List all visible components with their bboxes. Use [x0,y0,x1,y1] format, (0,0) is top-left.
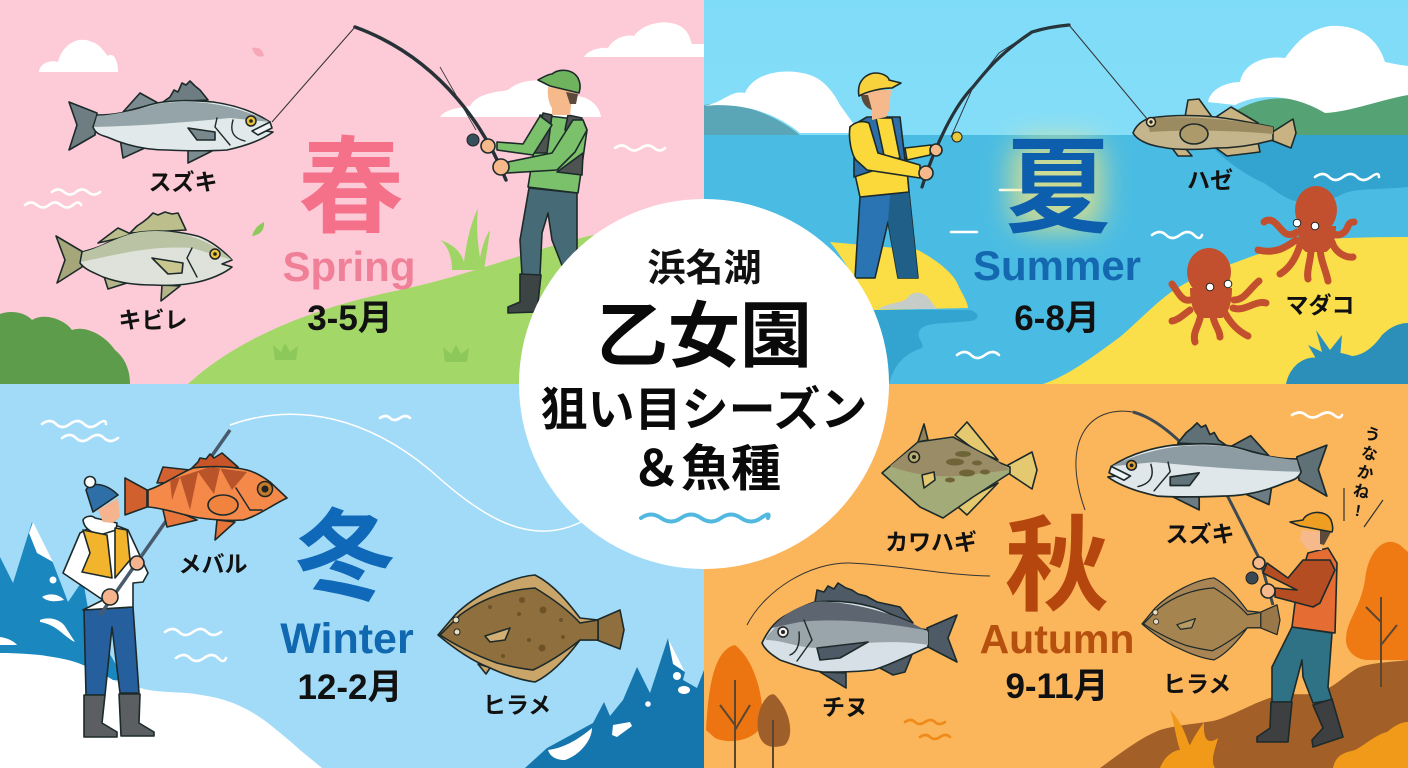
fish: mebaru [125,453,287,540]
line: winter [230,414,585,531]
speech: unakane: か [1355,462,1375,484]
decorative wave [641,514,769,522]
summer small water [874,310,978,384]
winter left trees [0,522,125,680]
summer sea [704,135,1408,384]
spring left bush [0,312,130,384]
angler: autumn [1253,512,1343,747]
heading: autumn kanji: 秋 [1005,509,1109,625]
summer deep water [1212,135,1408,203]
octopus: top [1258,186,1354,281]
spring hill [188,225,704,384]
petals [252,48,264,57]
rod and line: summer [922,25,1148,187]
heading: Winter: Winter [280,615,414,663]
fish: haze [1133,99,1296,156]
panel: autumn [704,384,1408,768]
spring clouds [39,22,704,117]
label: kawahagi: カワハギ [885,529,977,555]
angler: winter [63,430,230,737]
heading: spring kanji: 春 [298,130,404,247]
months: summer: 6-8月 [1014,299,1100,338]
label: suzuki autumn: スズキ [1166,521,1234,547]
months: spring: 3-5月 [307,299,393,338]
heading: Autumn: Autumn [980,616,1134,662]
autumn trees right [1346,542,1408,687]
months: winter: 12-2月 [297,668,403,707]
summer bush [1286,323,1408,384]
label: chinu: チヌ [822,694,868,720]
label: suzuki: スズキ [148,169,218,195]
label: hirame winter: ヒラメ [483,692,551,718]
months: autumn: 9-11月 [1005,667,1109,706]
speech: unakane: ! [1354,503,1362,520]
heading: winter kanji: 冬 [295,502,395,614]
summer far hills [704,104,800,135]
autumn bush [1333,722,1408,768]
fish: hirame autumn [1142,578,1280,660]
panel: spring [0,0,704,384]
rod and line: spring [272,27,506,180]
autumn waves [905,412,1342,739]
spring grass [273,208,490,362]
angler: spring [481,70,587,313]
heading: Summer: Summer [973,242,1141,289]
center circle [519,199,889,569]
fish: kibire [56,212,232,301]
panel: summer [704,0,1408,384]
fish: chinu [762,583,957,688]
autumn left trees [706,645,790,768]
label: haze: ハゼ [1187,167,1233,193]
fish: kawahagi [882,422,1037,518]
summer kanji glow [1012,140,1102,230]
speech: unakane [1344,425,1383,527]
summer rock [878,293,937,309]
speech: unakane: う [1362,425,1382,446]
heading: summer kanji: 夏 [1005,130,1111,247]
summer clouds [704,26,1408,133]
rod and line: autumn [747,411,1273,625]
label: kibire: キビレ [118,307,188,333]
label: hirame autumn: ヒラメ [1163,671,1231,697]
winter snow [0,653,322,768]
fish: suzuki autumn [1108,423,1327,510]
angler: summer [849,73,942,278]
speech: unakane: ね [1351,481,1371,503]
spring waves [25,146,665,208]
label: madako: マダコ [1286,292,1354,318]
autumn hill [1100,660,1408,768]
winter waves [42,416,620,661]
summer right sand [1043,237,1408,384]
title line 1: 浜名湖 [647,248,762,290]
winter right trees [525,638,704,768]
summer left sand [830,242,968,310]
heading: Spring: Spring [282,243,416,290]
fish: hirame winter [438,575,624,682]
title line 2: 乙女園 [596,297,812,377]
panel: winter [0,384,704,768]
summer waves [951,174,1379,358]
title line 3: 狙い目シーズン [541,383,867,436]
octopus: bottom [1172,248,1266,342]
title line 4: ＆魚種 [631,441,781,497]
speech: unakane: な [1359,443,1379,465]
label: mebaru: メバル [178,551,248,577]
fish: suzuki spring [69,81,273,163]
autumn grass [1160,710,1218,768]
